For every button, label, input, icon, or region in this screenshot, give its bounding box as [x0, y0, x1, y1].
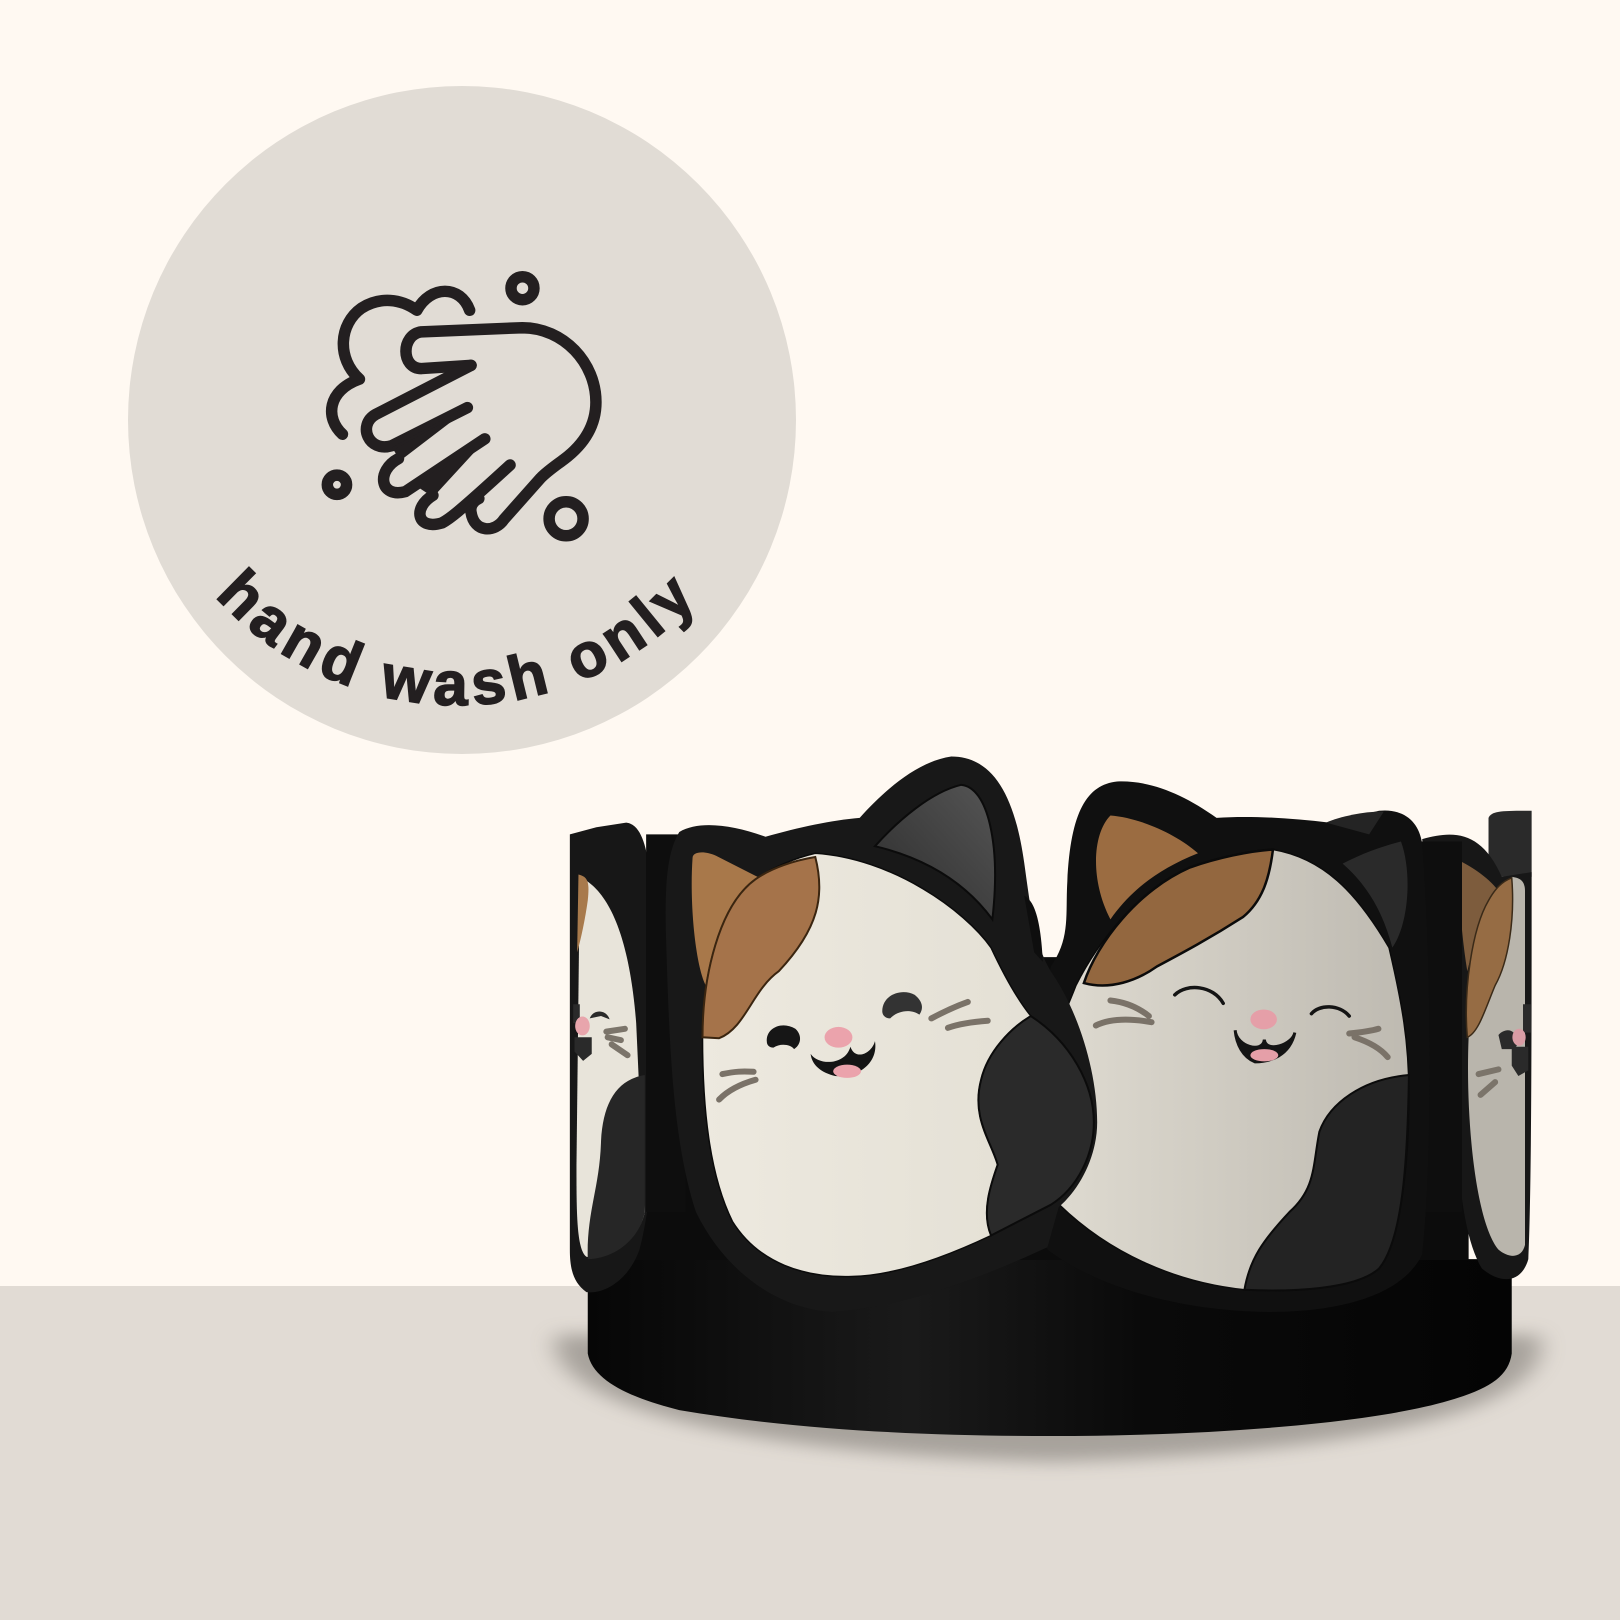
badge: hand wash only	[128, 86, 796, 754]
grey ear	[875, 785, 995, 919]
dark gap between cats	[646, 834, 1462, 1212]
product: cat candle holder	[555, 757, 1540, 1462]
far left side cat	[570, 823, 656, 1292]
closed eyes	[1175, 988, 1349, 1016]
eyes and mouth	[573, 1004, 610, 1061]
black spot	[1244, 1075, 1409, 1291]
floor	[0, 1286, 1620, 1620]
black ear	[1343, 841, 1408, 948]
whiskers	[606, 1029, 628, 1055]
tongue	[1250, 1049, 1278, 1061]
outline	[1422, 835, 1532, 1279]
outline	[570, 823, 656, 1292]
whiskers	[1479, 1069, 1498, 1095]
whiskers	[1096, 1000, 1388, 1057]
back ear edge	[1024, 896, 1043, 962]
black spot	[978, 1016, 1094, 1235]
face	[1096, 988, 1388, 1062]
nose	[1250, 1009, 1277, 1029]
body	[703, 853, 1031, 1277]
brown patch	[1084, 849, 1273, 985]
outline	[666, 757, 1097, 1312]
right eye	[882, 992, 922, 1018]
ear tab	[1489, 811, 1532, 877]
mouth	[1235, 1030, 1295, 1062]
face	[573, 1004, 628, 1061]
back ear	[1326, 812, 1384, 834]
right main cat	[1035, 781, 1430, 1312]
black base ring	[588, 1259, 1512, 1436]
face	[1479, 1004, 1531, 1095]
brown ear	[1459, 860, 1498, 971]
body	[1468, 877, 1525, 1256]
face	[719, 992, 988, 1100]
badge label: hand wash only	[216, 566, 692, 706]
nose	[1512, 1029, 1526, 1046]
nose	[825, 1027, 852, 1048]
brown ear	[577, 874, 588, 952]
icon: washing hands with bubbles	[327, 277, 596, 536]
outline	[1035, 781, 1430, 1312]
brown ear	[1096, 816, 1198, 919]
left eye	[767, 1025, 800, 1049]
mouth	[811, 1041, 875, 1076]
whiskers	[719, 1002, 988, 1100]
floor shadow	[555, 1335, 1540, 1462]
badge circle	[128, 86, 796, 754]
far right side cat	[1422, 811, 1532, 1279]
brown patch	[1466, 878, 1513, 1037]
background wall	[0, 0, 1620, 1286]
black spot	[588, 1075, 645, 1259]
brown ear	[692, 852, 758, 985]
body	[576, 877, 645, 1257]
body	[1056, 849, 1409, 1291]
back black wall behind cats	[633, 957, 1469, 1260]
eye and mouth	[1498, 1004, 1531, 1076]
nose	[575, 1017, 590, 1035]
tongue	[833, 1065, 861, 1078]
brown patch	[703, 857, 819, 1038]
left main cat	[666, 757, 1097, 1312]
